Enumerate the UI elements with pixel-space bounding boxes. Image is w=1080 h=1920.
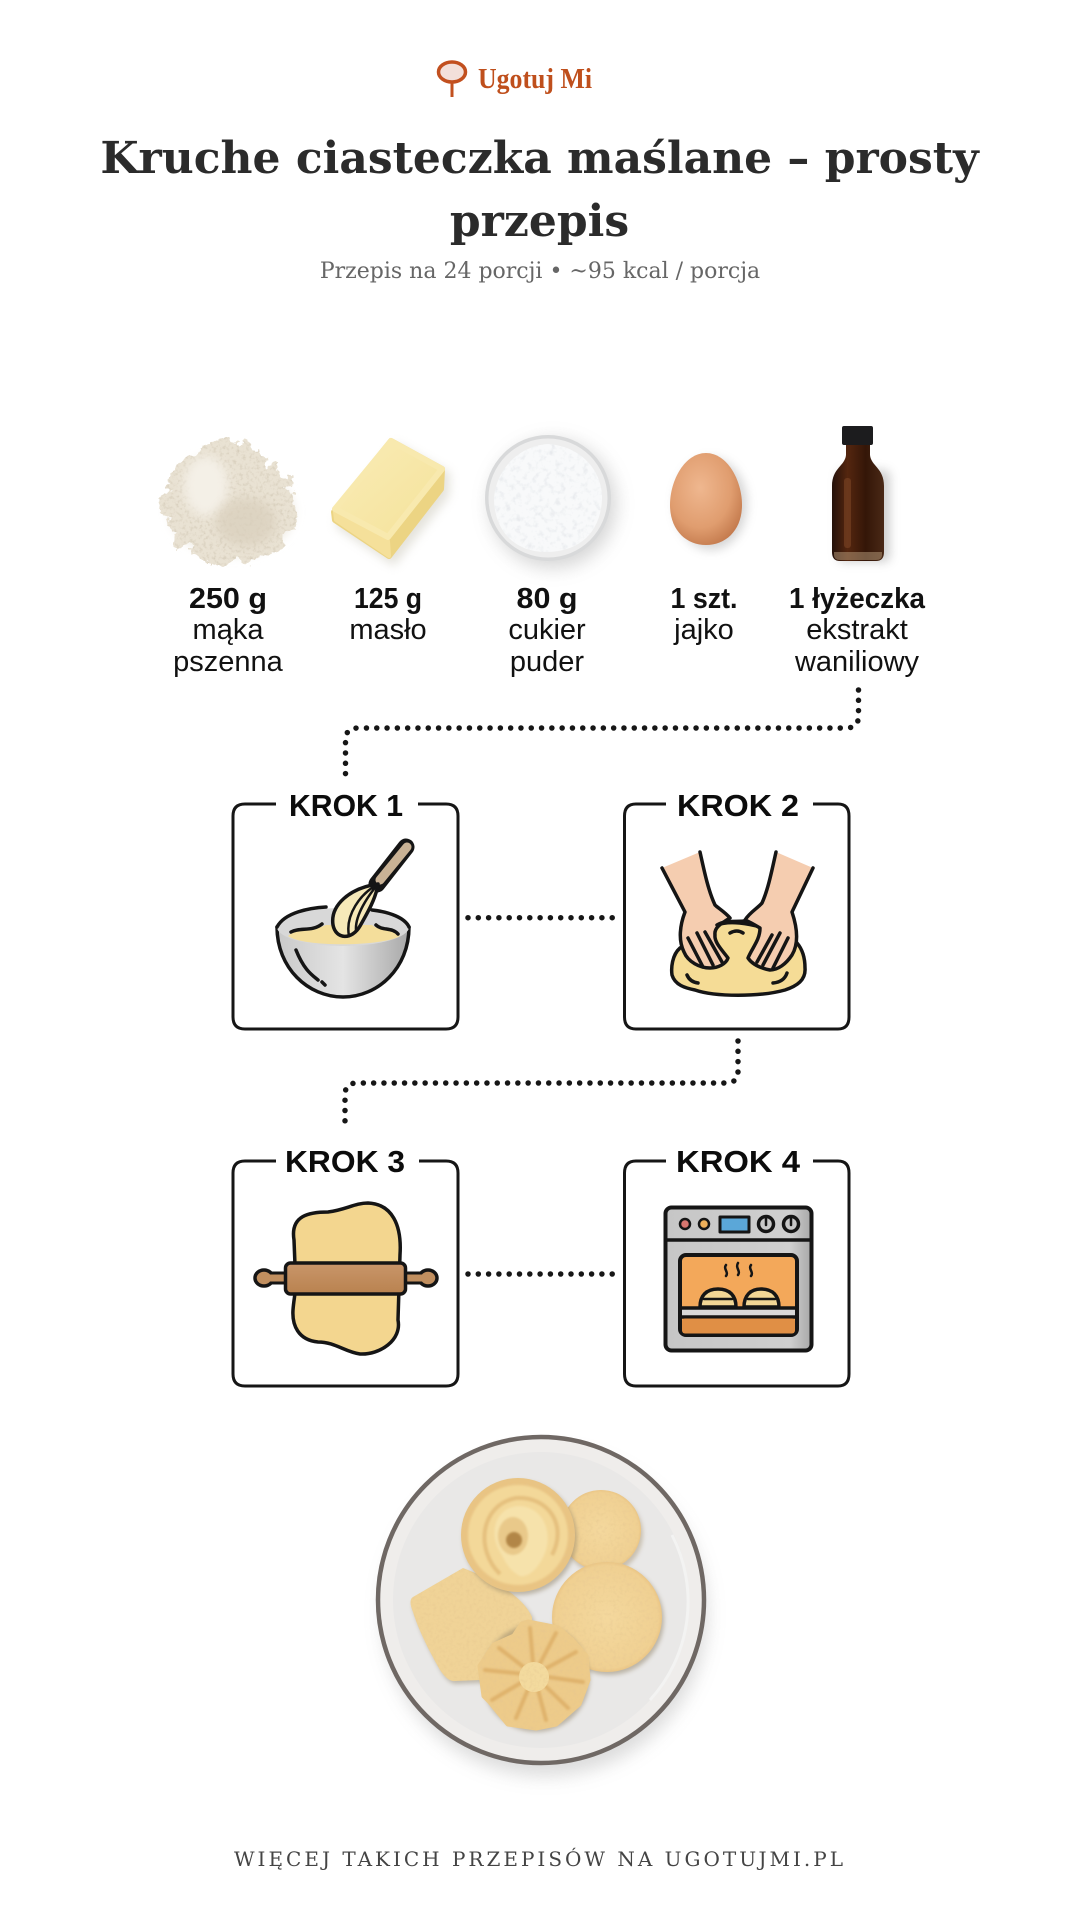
plate shadow	[383, 1452, 707, 1776]
logo: Ugotuj Mi	[438, 62, 592, 97]
step frame	[624, 1161, 849, 1386]
panel: step 4	[624, 1144, 849, 1386]
ingredient label: flour: mąka	[193, 614, 264, 646]
ingredient image: flour	[164, 436, 295, 566]
ingredient image: sugar bowl	[485, 435, 616, 568]
result: plate of cookies	[378, 1437, 707, 1776]
logo wordmark: Ugotuj Mi	[478, 64, 592, 95]
ingredient label: flour: 250 g	[189, 583, 267, 615]
ingredient image: butter	[334, 441, 450, 566]
ingredient image: egg	[670, 453, 747, 550]
ingredient label: butter: masło	[349, 614, 427, 646]
icon: hands kneading dough	[662, 852, 813, 995]
panel: ingredients	[164, 426, 926, 678]
icon: spoon	[438, 62, 466, 97]
cookie: spiral	[461, 1478, 577, 1595]
ingredient label: sugar: puder	[510, 646, 584, 678]
panel: step 2	[624, 788, 849, 1029]
ingredient label: butter: 125 g	[354, 583, 422, 615]
title: przepis	[450, 196, 629, 247]
arrow: ingredients to step 1	[346, 690, 858, 774]
step heading: KROK 3	[285, 1144, 405, 1179]
subtitle: Przepis na 24 porcji • ~95 kcal / porcja	[320, 259, 760, 284]
step heading: KROK 4	[676, 1144, 801, 1179]
arrow: step 1 to step 2	[468, 915, 617, 920]
cookie: star	[480, 1622, 590, 1732]
icon: rolling pin on dough	[255, 1203, 437, 1354]
ingredient label: vanilla: ekstrakt	[806, 614, 908, 646]
ingredient label: flour: pszenna	[173, 646, 284, 678]
ingredient label: sugar: 80 g	[516, 583, 578, 615]
step frame	[233, 1161, 458, 1386]
icon: oven	[666, 1208, 812, 1350]
step frame	[233, 804, 458, 1029]
step heading: KROK 2	[677, 788, 799, 823]
ingredient label: egg: 1 szt.	[670, 583, 738, 615]
title: Kruche ciasteczka maślane – prosty	[100, 133, 980, 184]
cookie: square	[410, 1568, 534, 1684]
cookie: back round	[561, 1490, 643, 1574]
panel: step 3	[233, 1144, 458, 1386]
ingredient image: vanilla bottle	[832, 426, 890, 562]
step frame	[624, 804, 849, 1029]
step heading: KROK 1	[289, 788, 403, 823]
panel: step 1	[233, 788, 458, 1029]
icon: bowl and whisk	[277, 847, 409, 997]
cookie: right round	[552, 1562, 664, 1675]
ingredient label: egg: jajko	[673, 614, 734, 646]
ingredient label: vanilla: waniliowy	[794, 646, 920, 678]
ingredient label: sugar: cukier	[508, 614, 586, 646]
plate	[378, 1437, 704, 1763]
arrow: step 3 to step 4	[468, 1271, 617, 1277]
arrow: step 2 to step 3	[345, 1041, 738, 1131]
ingredient label: vanilla: 1 łyżeczka	[789, 583, 926, 615]
footer: WIĘCEJ TAKICH PRZEPISÓW NA UGOTUJMI.PL	[234, 1846, 846, 1871]
title	[100, 133, 980, 247]
